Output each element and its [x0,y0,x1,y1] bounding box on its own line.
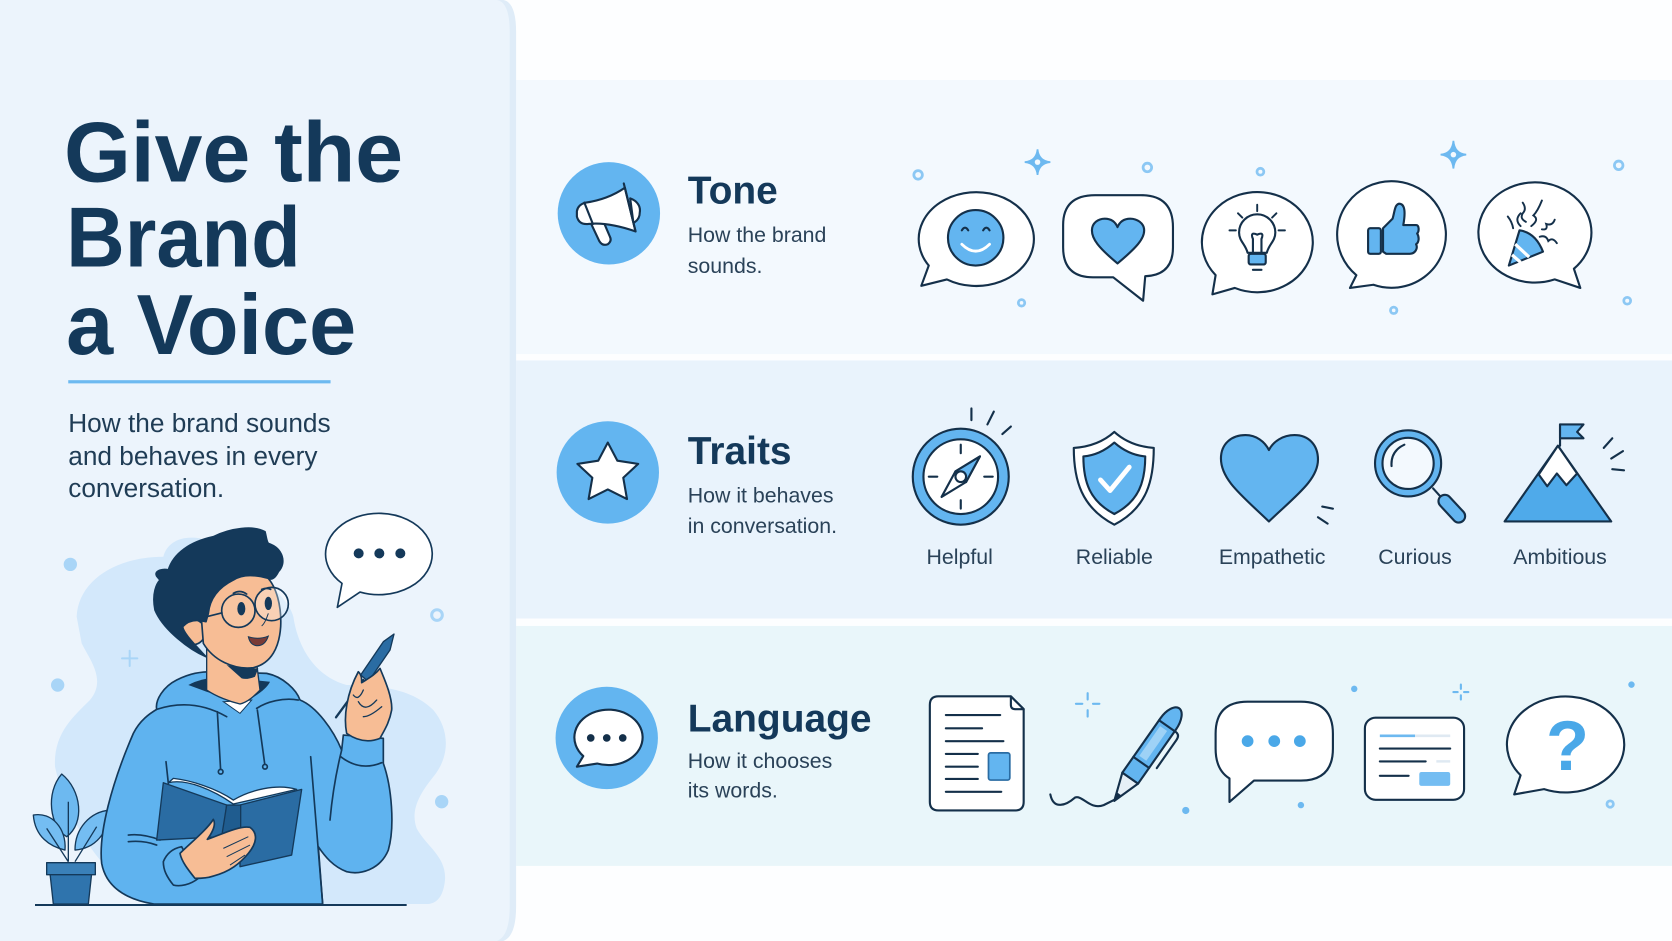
text: language description: How it chooses [688,749,832,773]
title: Give the [64,105,403,200]
title: a Voice [66,278,356,373]
title underline [68,380,331,383]
trait: helpful compass [913,408,1011,569]
text: subtitle: How the brand sounds [68,408,331,438]
hoodie [101,672,392,904]
text: subtitle: and behaves in every [68,441,318,471]
title: Brand [66,191,301,286]
panel: left title panel [0,0,516,941]
label: empathetic: Empathetic [1219,545,1326,569]
title [64,105,403,373]
icon: light bulb speech bubble [1202,192,1313,294]
right hand [345,668,392,741]
decorative sparkle and dots: language [1076,681,1635,814]
text: traits description: How it behaves [688,483,833,507]
icon: question speech bubble [1507,697,1624,794]
label: helpful: Helpful [927,545,993,569]
icon: thumbs up speech bubble [1337,181,1446,288]
decorative sparkle and ring dots: tone [914,141,1631,314]
icon: star [557,421,659,524]
icon: heart speech bubble [1063,195,1173,301]
glasses and face [207,587,288,646]
text: traits description: in conversation. [688,514,837,538]
left hand and cuff [163,819,255,886]
illustration: person with book [33,513,448,905]
icon: party popper speech bubble [1478,182,1591,288]
icon: chat bubble [556,687,658,789]
desk line [35,902,407,908]
plant [33,774,110,904]
icon: megaphone [558,162,660,264]
label: reliable: Reliable [1076,545,1153,569]
head [154,528,283,668]
text: tone description: sounds. [688,254,762,278]
icon: typing speech bubble [1216,702,1333,802]
text: tone description: How the brand [688,223,826,247]
label: curious: Curious [1378,545,1452,569]
trait: reliable shield [1074,432,1154,569]
heading: traits: Traits [688,430,792,473]
trait: curious magnifier [1375,430,1459,569]
speech bubble [326,513,432,607]
open book [157,778,302,867]
icon: question speech bubble: ? [1546,706,1589,785]
neck and collar [188,643,270,713]
icon: document [930,696,1024,810]
icon: text card [1365,718,1464,800]
trait: empathetic heart [1219,435,1333,569]
panel: traits band [516,360,1672,619]
panel: language band [516,626,1672,866]
trait: ambitious mountain [1505,424,1624,569]
text: subtitle: conversation. [68,473,224,503]
icon: smiley speech bubble [919,192,1034,286]
panel: tone band [516,80,1672,354]
decorative dots [51,558,448,808]
heading: tone: Tone [688,170,778,213]
hood lines and drawstrings [128,699,382,904]
text: language description: its words. [688,779,778,803]
heading: language: Language [688,698,872,741]
background blob [55,538,446,904]
icon: pen with squiggle [1050,703,1192,810]
pen [336,634,394,717]
label: ambitious: Ambitious [1513,545,1607,569]
